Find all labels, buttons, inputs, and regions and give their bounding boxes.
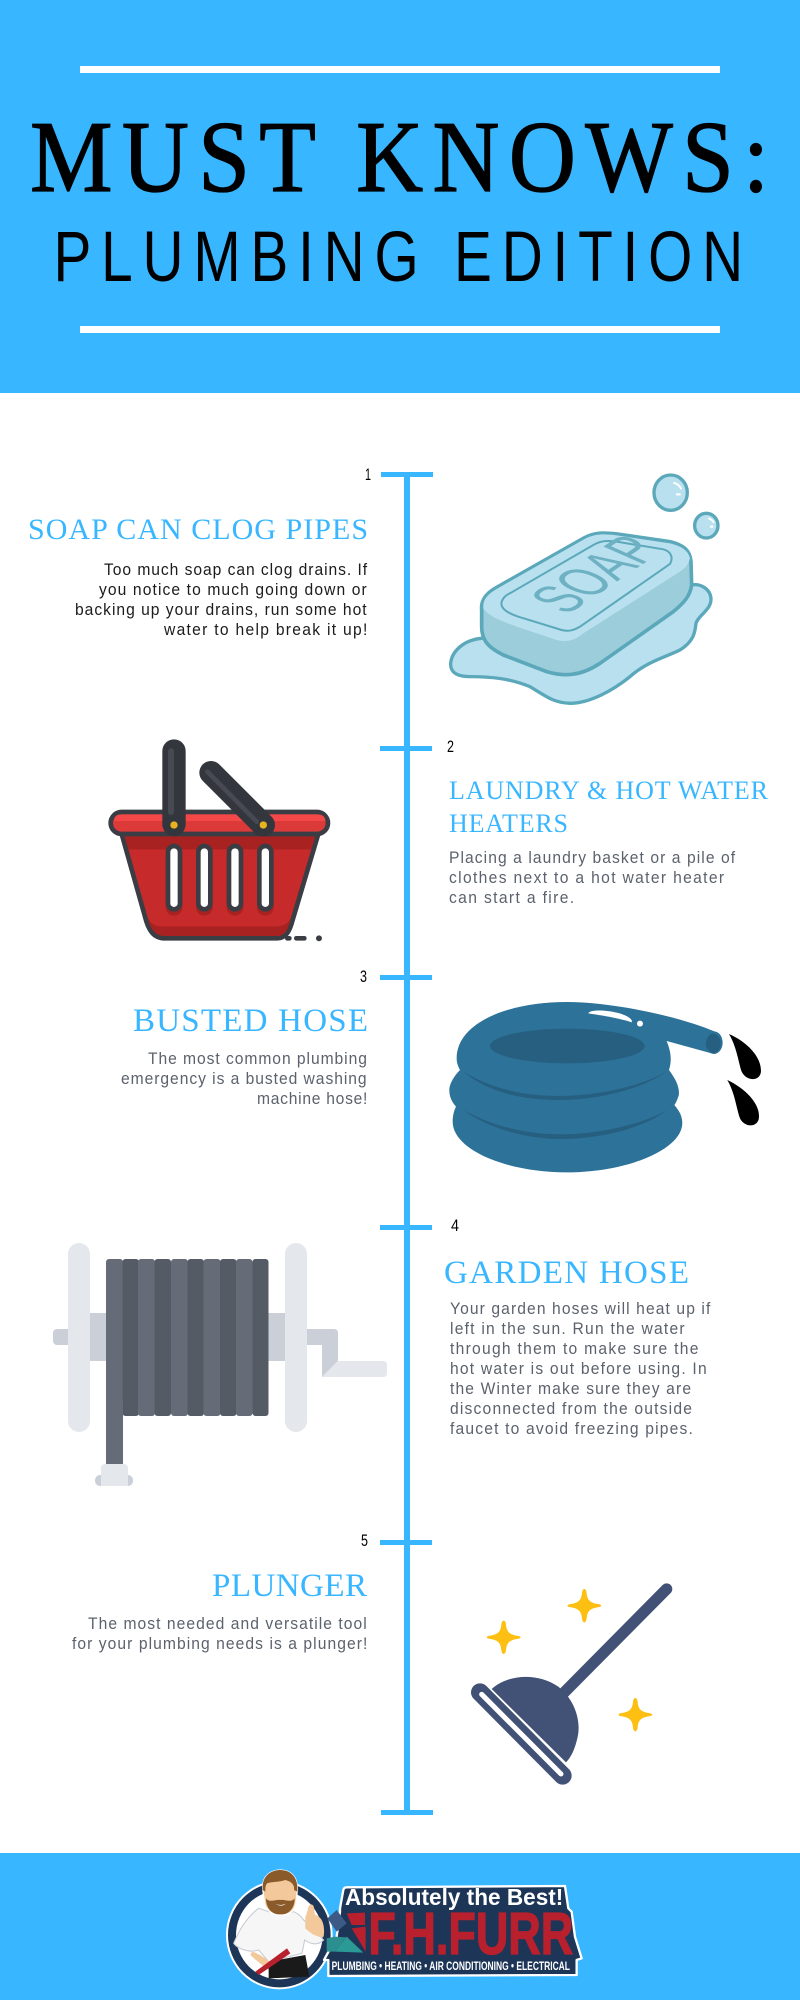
mascot badge bbox=[226, 1870, 333, 1989]
step number 1: 1 bbox=[365, 465, 371, 484]
water drops bbox=[729, 1034, 761, 1079]
heading: garden hose: GARDEN HOSE bbox=[444, 1255, 689, 1291]
panel: soap text bbox=[28, 513, 368, 639]
panel: garden hose text bbox=[444, 1255, 711, 1438]
body: garden hose: Your garden hoses will heat up if bbox=[450, 1299, 711, 1318]
ground marks bbox=[294, 936, 307, 941]
body: laundry: clothes next to a hot water heater bbox=[449, 868, 725, 887]
highlight bbox=[588, 1010, 632, 1022]
icon: laundry basket bbox=[111, 739, 328, 941]
handle bbox=[563, 1589, 667, 1693]
body: garden hose: left in the sun. Run the water bbox=[450, 1319, 685, 1338]
timeline bbox=[380, 472, 433, 1815]
mascot belt bbox=[269, 1955, 309, 1978]
body: soap: Too much soap can clog drains. If bbox=[104, 560, 368, 579]
body: garden hose: hot water is out before using. In bbox=[450, 1359, 707, 1378]
heading: busted hose: BUSTED HOSE bbox=[133, 1003, 368, 1039]
coil shadows bbox=[463, 1072, 667, 1100]
body: laundry: Placing a laundry basket or a pile of bbox=[449, 848, 736, 867]
axle and crank bbox=[53, 1329, 83, 1345]
body: garden hose: disconnected from the outside bbox=[450, 1399, 692, 1418]
soap body bbox=[482, 533, 692, 675]
dome bbox=[492, 1677, 579, 1762]
body: laundry: can start a fire. bbox=[449, 888, 574, 907]
rim bbox=[480, 1692, 563, 1776]
bubbles bbox=[654, 475, 718, 538]
hose coils bbox=[106, 1259, 268, 1466]
body: garden hose: through them to make sure the bbox=[450, 1339, 698, 1358]
panel: laundry text bbox=[449, 776, 769, 907]
services: PLUMBING • HEATING • AIR CONDITIONING • ELECTRICAL bbox=[332, 1959, 570, 1973]
icon: hose reel bbox=[53, 1243, 387, 1486]
heading: plunger: PLUNGER bbox=[212, 1568, 367, 1604]
handles bbox=[162, 739, 186, 836]
mascot shirt bbox=[234, 1908, 324, 1962]
flanges bbox=[68, 1243, 90, 1432]
body: plunger: for your plumbing needs is a plunger! bbox=[72, 1634, 367, 1653]
header banner bbox=[0, 0, 800, 393]
footer band bbox=[0, 1853, 800, 2000]
rim bbox=[111, 812, 328, 834]
body: garden hose: the Winter make sure they are bbox=[450, 1379, 691, 1398]
icon: plunger bbox=[480, 1589, 667, 1776]
hose opening bbox=[490, 1029, 645, 1063]
body: laundry bbox=[449, 848, 736, 907]
basket body bbox=[122, 834, 318, 938]
panel: busted hose text bbox=[121, 1003, 368, 1108]
body: busted hose bbox=[121, 1049, 367, 1108]
body: garden hose bbox=[450, 1299, 711, 1438]
body: garden hose: faucet to avoid freezing pipes. bbox=[450, 1419, 693, 1438]
step number 5: 5 bbox=[361, 1531, 368, 1550]
heading: laundry: HEATERS bbox=[449, 809, 568, 838]
emblem bbox=[327, 1910, 366, 1953]
slots bbox=[166, 850, 274, 916]
step number 3: 3 bbox=[360, 967, 367, 986]
coils and nozzle bbox=[449, 1002, 715, 1172]
icon: coiled hose bbox=[449, 1002, 761, 1172]
heading: soap: SOAP CAN CLOG PIPES bbox=[28, 513, 368, 546]
mascot head bbox=[263, 1870, 297, 1915]
puddle bbox=[451, 585, 711, 703]
heading: laundry bbox=[449, 776, 769, 838]
tagline: Absolutely the Best! bbox=[345, 1884, 563, 1910]
subtitle: PLUMBING EDITION bbox=[54, 217, 743, 296]
body: soap: you notice to much going down or bbox=[99, 580, 367, 599]
brand banner bbox=[324, 1884, 582, 1976]
step number 2: 2 bbox=[447, 737, 454, 756]
body: plunger: The most needed and versatile tool bbox=[88, 1614, 367, 1633]
body: soap bbox=[75, 560, 368, 639]
body: soap: backing up your drains, run some hot bbox=[75, 600, 367, 619]
body: busted hose: The most common plumbing bbox=[148, 1049, 367, 1068]
step number 4: 4 bbox=[451, 1216, 459, 1235]
logo: F.H. Furr bbox=[226, 1870, 582, 1989]
brand name: F.H.FURR bbox=[368, 1901, 573, 1967]
soap top face bbox=[483, 534, 690, 641]
icon: soap bar bbox=[451, 475, 718, 703]
foot bbox=[95, 1475, 133, 1486]
panel: plunger text bbox=[72, 1568, 367, 1653]
body: plunger bbox=[72, 1614, 367, 1653]
body: busted hose: machine hose! bbox=[257, 1089, 367, 1108]
title: MUST KNOWS: bbox=[30, 101, 769, 214]
heading: laundry: LAUNDRY & HOT WATER bbox=[449, 776, 769, 805]
sparkles bbox=[487, 1589, 652, 1731]
body: soap: water to help break it up! bbox=[163, 620, 367, 639]
body: busted hose: emergency is a busted washing bbox=[121, 1069, 367, 1088]
soap label: SOAP bbox=[516, 528, 676, 621]
mascot arm and hand bbox=[250, 1952, 277, 1970]
